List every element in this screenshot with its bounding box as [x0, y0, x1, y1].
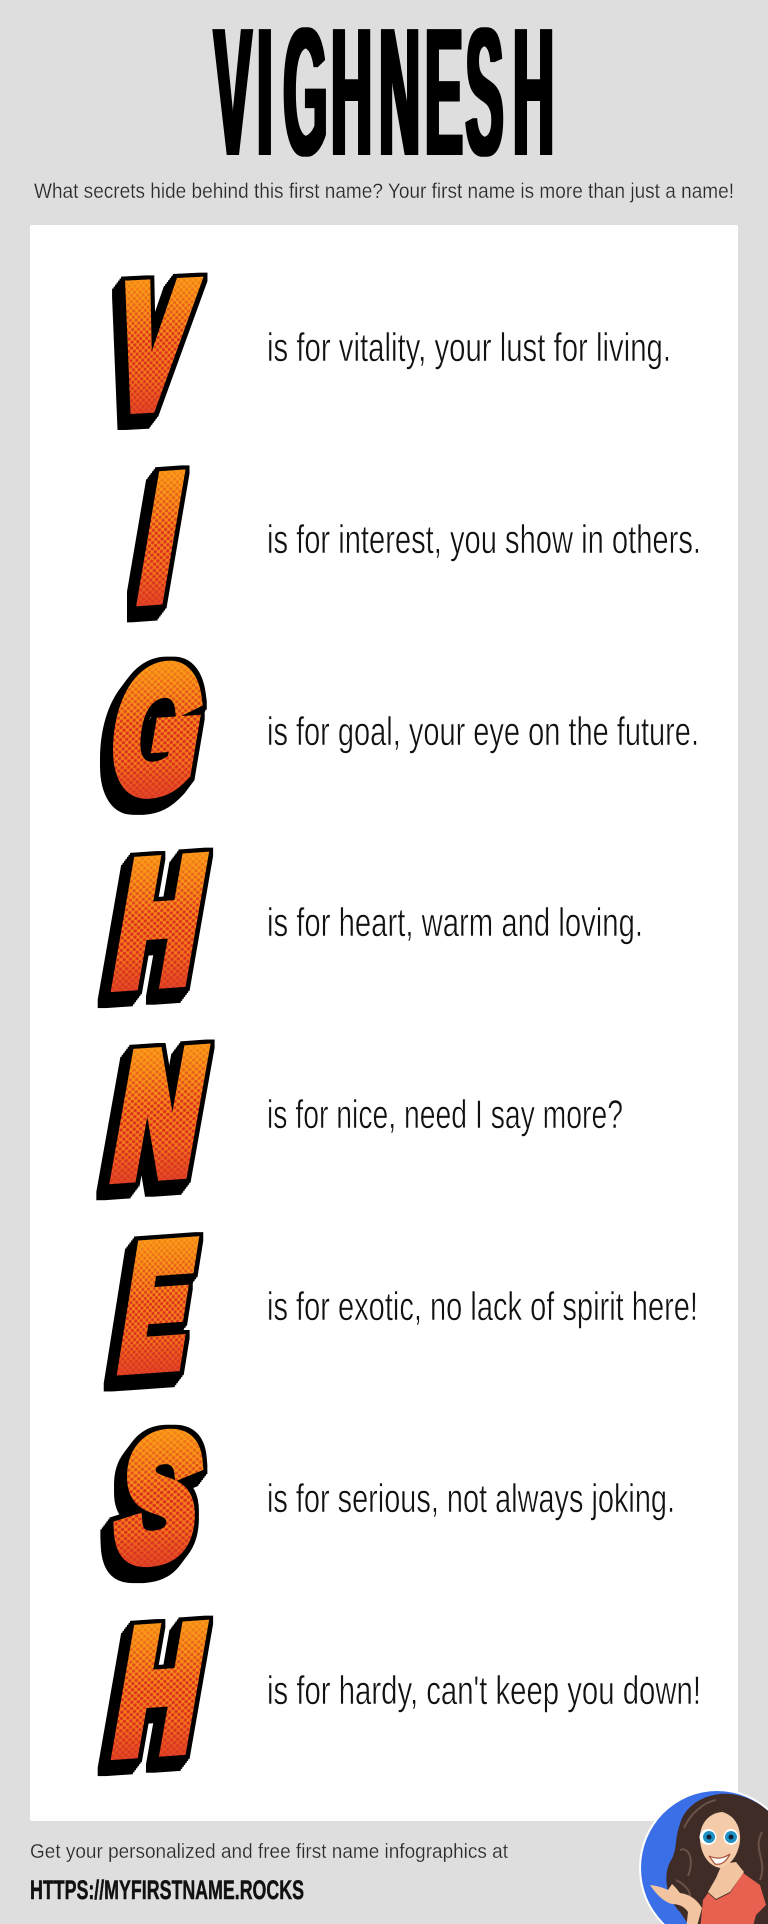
letter E: E: [120, 1209, 195, 1402]
letter V: V: [115, 250, 197, 442]
text: H meaning: is for heart, warm and loving.: [267, 901, 643, 945]
row: H second: [114, 1594, 701, 1788]
letter G: G: [109, 634, 203, 828]
row: E: [120, 1209, 698, 1402]
panel: letter meanings: [30, 225, 738, 1821]
row: S: [115, 1400, 675, 1595]
row: V: [115, 250, 671, 442]
row: H: [114, 826, 643, 1020]
footer text: call to action: Get your personalized and free first name infographics at: [30, 1840, 508, 1863]
letter I: I: [140, 442, 181, 633]
row: N: [113, 1018, 623, 1211]
icon: avatar woman: [639, 1789, 768, 1924]
footer url: HTTPS://MYFIRSTNAME.ROCKS: [30, 1875, 304, 1905]
letter N: N: [113, 1018, 205, 1211]
row: I: [140, 442, 701, 633]
letter S: S: [115, 1400, 201, 1595]
letter H: H: [114, 826, 204, 1020]
text: N meaning: is for nice, need I say more?: [267, 1093, 623, 1137]
row: G: [109, 634, 699, 828]
letter H second: H: [114, 1594, 204, 1788]
